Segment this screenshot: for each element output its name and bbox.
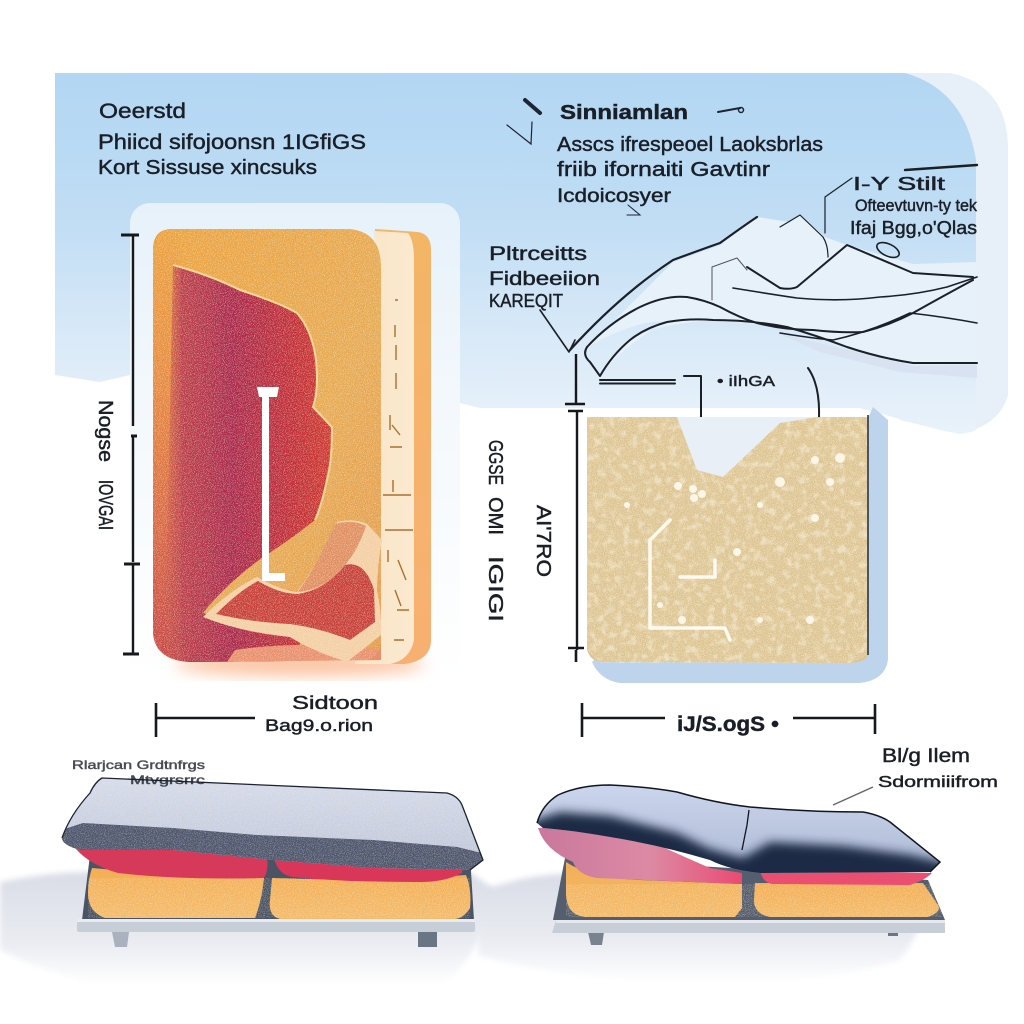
label: upper right callout: I-Y Stilt <box>853 174 945 194</box>
legs <box>112 932 129 947</box>
tray highlight <box>556 920 945 923</box>
cushion dark band <box>537 804 939 873</box>
cushion crease <box>742 810 749 850</box>
heading block: left <box>98 100 366 179</box>
blue backing <box>592 407 888 683</box>
fold red inner <box>216 564 375 640</box>
folded foam layer <box>203 520 382 662</box>
frame backing <box>553 858 945 920</box>
wedge highlight outline <box>173 265 332 520</box>
label: left horizontal dimension <box>265 693 378 735</box>
heading block: left: Oeerstd <box>99 100 186 123</box>
label: upper right callout <box>850 174 977 238</box>
rotated label: right dimension: OMI <box>484 497 506 535</box>
rotated label: right dimension: AI'7RO <box>532 505 554 577</box>
bottom glow under fold <box>228 645 381 662</box>
speckle on foam <box>88 878 470 918</box>
dark top cushion <box>537 786 939 873</box>
label: left horizontal dimension: Sidtoon <box>292 693 378 713</box>
white I-beam marker <box>257 387 285 581</box>
floor shadow: right <box>478 874 924 982</box>
pale back panel <box>880 73 1008 434</box>
panel: red foam cross-section block <box>140 229 431 676</box>
orange foam right <box>754 883 939 917</box>
leader line: right cushion <box>833 787 873 805</box>
tray highlight <box>77 919 475 922</box>
cushion dark band <box>62 823 482 870</box>
panel: left cushion stack <box>55 776 490 947</box>
right edge line <box>867 415 869 655</box>
heading block: right: Icdoicosyer <box>557 186 672 207</box>
orange glow shadow <box>175 652 425 676</box>
heading block: right: friib ifornaiti Gavtinr <box>557 159 770 181</box>
label: body callout: Pltrceitts <box>489 244 587 265</box>
tray <box>552 920 945 933</box>
speckle texture <box>153 229 381 661</box>
rotated label: left dimension <box>94 400 116 530</box>
label: left cushion callout <box>72 758 205 787</box>
beige foam <box>587 417 868 663</box>
orange foam left <box>88 868 264 918</box>
dimension line: right horizontal <box>582 703 875 737</box>
panel: beige foam block <box>587 407 888 683</box>
side markings <box>383 300 413 640</box>
floor shadow: left <box>0 872 495 985</box>
rotated label: left dimension: Nogse <box>94 400 116 462</box>
label: upper right callout: Ofteevtuvn-ty tek <box>855 196 977 215</box>
foam left shading <box>153 229 180 661</box>
label: right horizontal dimension: iJ/S.ogS • <box>677 713 779 736</box>
speckle texture <box>587 417 868 663</box>
pink layer <box>538 827 742 884</box>
grey top cushion <box>62 778 482 870</box>
blue header panel <box>55 73 976 433</box>
heading block: right: Asscs ifrespeoel Laoksbrlas <box>557 134 823 156</box>
label: upper right callout: Ifaj Bgg,o'Qlas <box>850 218 977 238</box>
label: right cushion callout: Sdormiiifrom <box>878 774 998 791</box>
foam side edge <box>360 229 431 664</box>
label: body callout: KAREQIT <box>489 291 563 311</box>
icon: pointer marks near right heading <box>507 100 744 215</box>
pale body fill <box>587 215 977 375</box>
rotated label: right dimension <box>484 440 554 622</box>
rotated label: left dimension: IOVGAI <box>94 480 116 530</box>
rotated label: right dimension: GGSE <box>484 440 506 485</box>
heading block: right <box>557 102 823 207</box>
label: right cushion callout: Bl/g Ilem <box>882 746 970 767</box>
speckle on cushion <box>60 776 485 872</box>
cushion outline <box>537 785 940 872</box>
cast shadow band <box>780 334 977 378</box>
heading block: left: Kort Sissuse xincsuks <box>98 157 317 179</box>
speckle on foam <box>566 884 942 917</box>
cushion light surface <box>537 786 939 873</box>
fold upper tan <box>298 522 366 592</box>
dimension line: left horizontal <box>156 703 255 737</box>
label: left horizontal dimension: Bag9.o.rion <box>265 716 373 735</box>
rotated label: right dimension: IGIGI <box>484 556 506 622</box>
frame backing <box>82 855 474 920</box>
dimension line: left vertical <box>121 235 140 654</box>
label: left cushion callout: Rlarjcan Grdtnfrgs <box>72 758 205 772</box>
red layer right <box>274 858 463 882</box>
label: small callout beside the line: • iIhGA <box>717 373 775 390</box>
legs <box>588 932 604 945</box>
card behind red foam block <box>130 203 460 681</box>
white bubbles <box>624 453 845 624</box>
red layer left <box>76 848 268 878</box>
cushion light surface <box>60 776 485 872</box>
notch backing <box>677 417 822 487</box>
line drawing: reclining body <box>540 165 977 468</box>
white L-shaped marks <box>650 520 730 640</box>
orange foam left <box>566 862 742 917</box>
panel: right cushion stack <box>520 780 955 945</box>
heading block: left: Phiicd sifojoonsn 1IGfiGS <box>98 131 366 154</box>
cushion outline <box>62 778 483 870</box>
red layer right <box>760 870 932 885</box>
heading block: right: Sinniamlan <box>560 102 688 124</box>
label: right cushion callout <box>878 746 998 791</box>
red wedge <box>165 265 332 665</box>
dimension line: right vertical <box>565 354 585 662</box>
foam front face <box>153 229 381 662</box>
label: left cushion callout: Mtvgrsrrc <box>130 773 205 787</box>
cream layer <box>355 231 414 664</box>
label: body callout: Fidbeeiion <box>489 269 600 290</box>
label: body callout <box>489 244 600 311</box>
orange foam right <box>270 875 470 919</box>
tray <box>77 919 475 932</box>
mottled blotches <box>587 417 868 663</box>
